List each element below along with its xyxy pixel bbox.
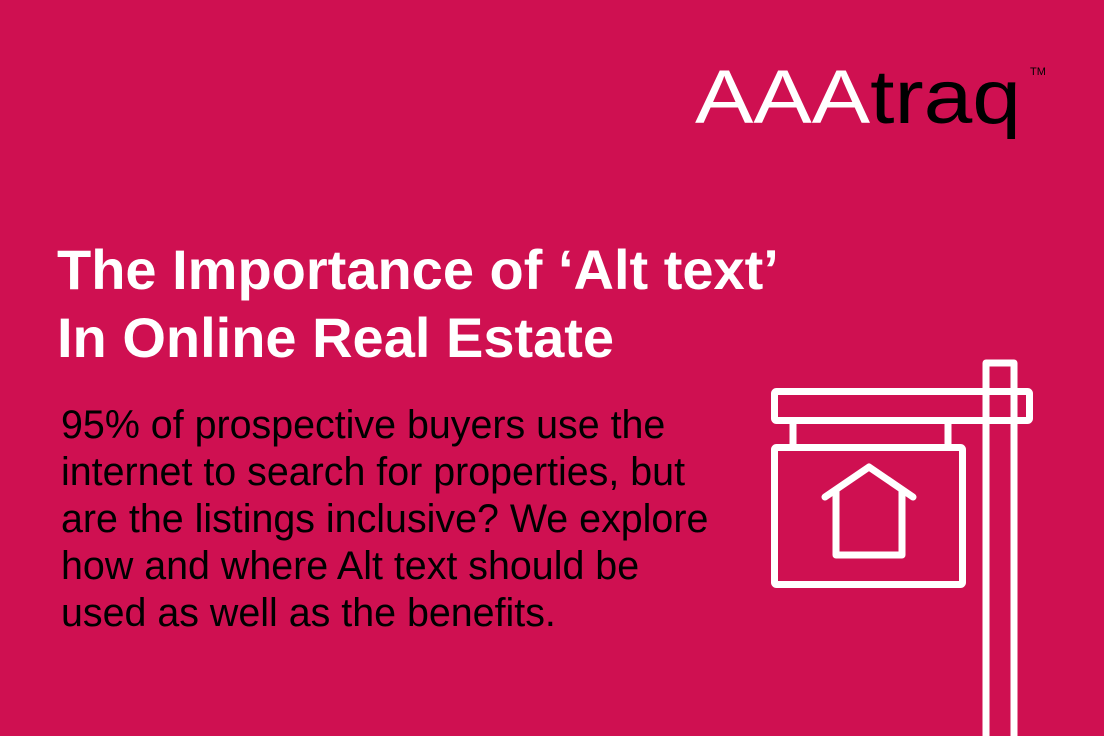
logo: TM — [1030, 66, 1046, 78]
title: The Importance of ‘Alt text’ — [57, 238, 779, 301]
body text: used as well as the benefits. — [61, 591, 556, 635]
body text: how and where Alt text should be — [61, 544, 639, 588]
title: In Online Real Estate — [57, 306, 614, 369]
body text: are the listings inclusive? We explore — [61, 497, 708, 541]
body text: internet to search for properties, but — [61, 450, 685, 494]
body text — [61, 403, 708, 635]
body text: 95% of prospective buyers use the — [61, 403, 665, 447]
title — [57, 238, 779, 369]
logo: AAA traq — [695, 55, 1021, 140]
